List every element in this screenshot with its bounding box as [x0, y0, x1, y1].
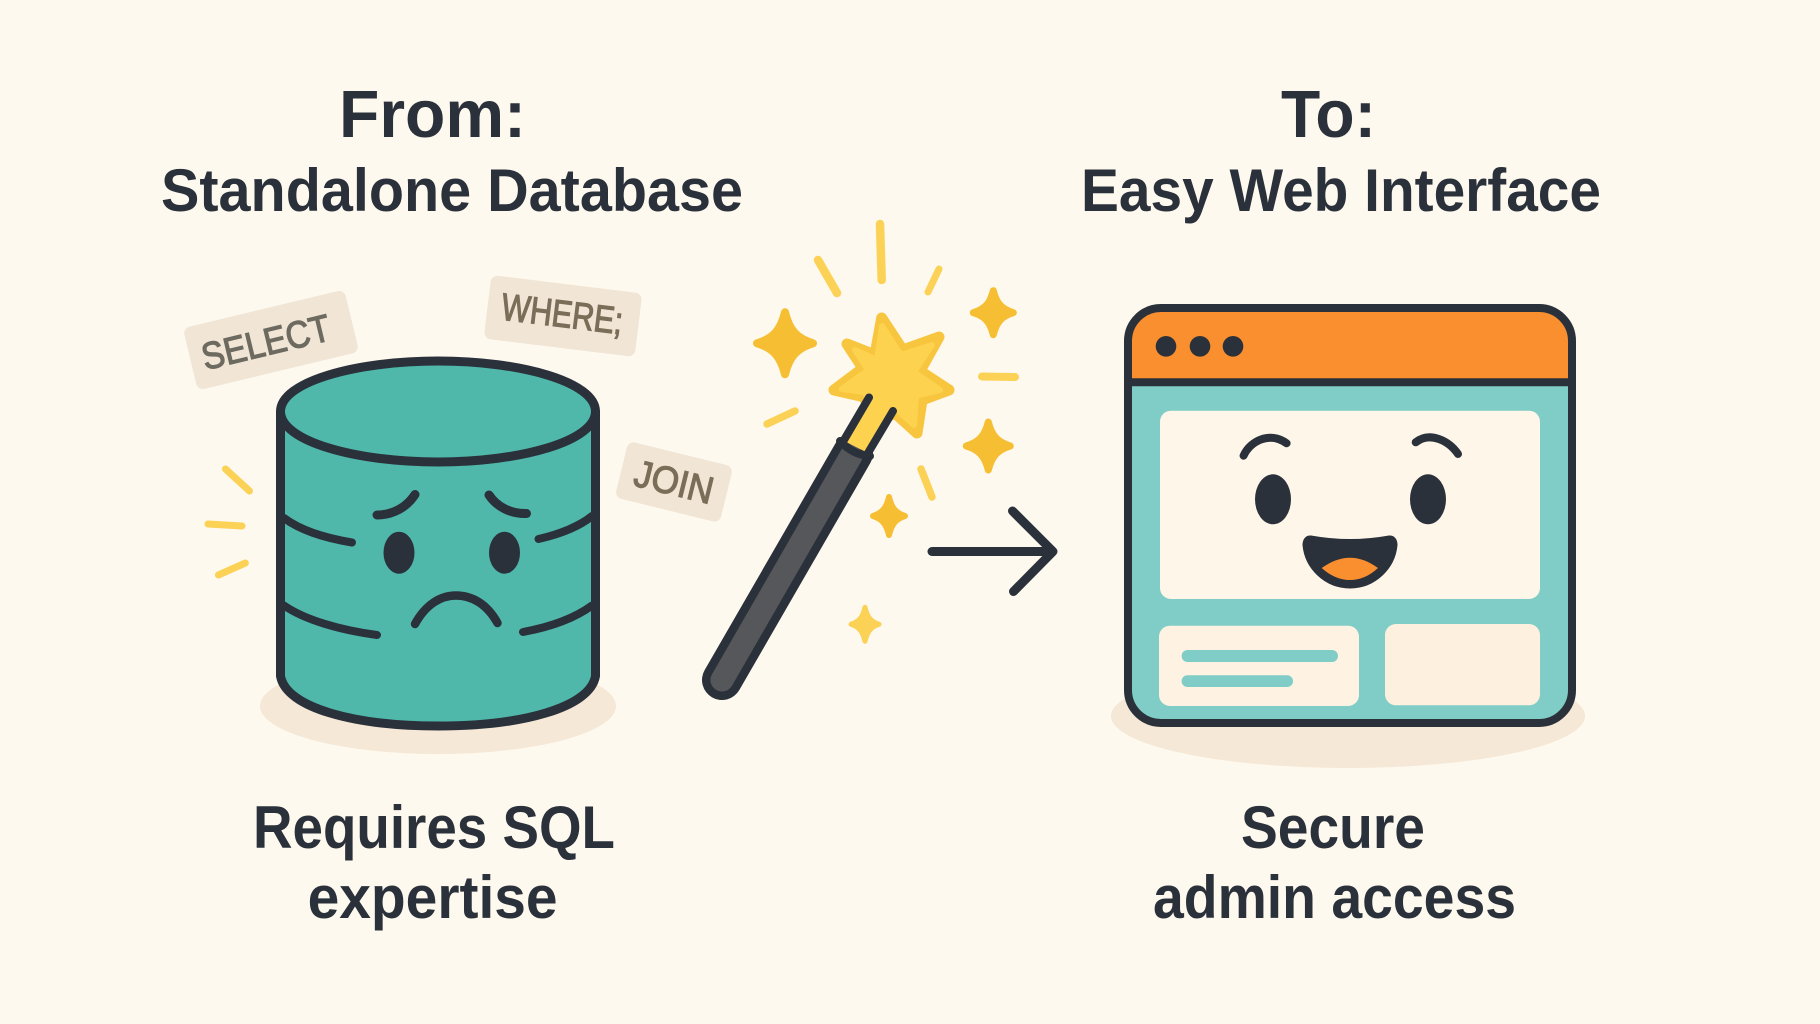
wand shaft — [722, 453, 853, 680]
sad face — [377, 494, 526, 624]
cylinder body — [280, 412, 596, 726]
title bar — [1128, 308, 1572, 382]
heading: from — [161, 77, 743, 224]
wand star — [834, 318, 949, 433]
card text lines — [1182, 650, 1338, 687]
wand tip — [846, 396, 894, 452]
caption: requires SQL expertise: expertise — [308, 864, 558, 931]
icon: happy browser window — [1111, 308, 1585, 768]
heading: from: Standalone Database — [161, 157, 743, 224]
icon: magic wand — [722, 318, 949, 680]
caption: secure admin access: admin access — [1153, 864, 1516, 931]
icon: sparkle rays — [767, 224, 1015, 497]
icon: magic sparkles — [757, 291, 1013, 641]
right card — [1385, 624, 1540, 705]
heading: from: From: — [339, 77, 526, 152]
tag: JOIN — [615, 441, 733, 523]
tag: SELECT — [183, 290, 359, 390]
tag: WHERE: WHERE; — [499, 287, 625, 343]
caption: requires SQL expertise: Requires SQL — [253, 794, 615, 861]
happy face — [1244, 437, 1458, 584]
main panel — [1160, 411, 1540, 599]
database shadow — [260, 658, 616, 754]
browser shadow — [1111, 664, 1585, 768]
window dots — [1156, 336, 1243, 357]
icon: stress marks — [208, 469, 250, 575]
arrow — [932, 511, 1053, 592]
tag: WHERE — [484, 275, 642, 357]
caption: secure admin access — [1153, 794, 1516, 931]
tag: SELECT: SELECT — [198, 308, 335, 379]
cylinder top — [280, 361, 596, 462]
tag: JOIN: JOIN — [630, 453, 718, 513]
window body — [1128, 308, 1572, 723]
heading: to: Easy Web Interface — [1081, 157, 1601, 224]
left card — [1159, 626, 1359, 706]
cylinder bands — [284, 516, 592, 635]
icon: sad database — [260, 361, 616, 754]
window outline — [1128, 308, 1572, 723]
caption: requires SQL expertise — [253, 794, 615, 931]
heading: to — [1081, 77, 1601, 224]
caption: secure admin access: Secure — [1241, 794, 1425, 861]
heading: to: To: — [1281, 77, 1376, 152]
